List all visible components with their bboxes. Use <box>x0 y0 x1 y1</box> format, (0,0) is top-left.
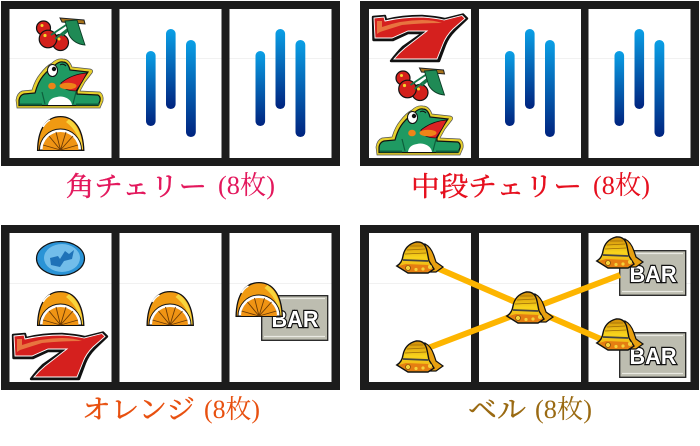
blue bars: right reel <box>256 29 305 137</box>
icon: bell <box>507 292 553 323</box>
panel: 中段チェリー <box>360 1 699 202</box>
icon: seven <box>13 332 107 379</box>
count: 8枚: (8枚) <box>218 171 275 200</box>
icon: bell <box>597 319 643 350</box>
winning lines <box>428 268 620 348</box>
icon: cherry <box>396 68 444 100</box>
icon: bell <box>597 237 643 268</box>
reel frame <box>1 225 340 390</box>
icon: orange <box>147 292 193 325</box>
icon: orange <box>236 283 282 316</box>
heading: ベル: ベル <box>468 395 526 425</box>
heading: 角チェリー: 角チェリー <box>66 172 207 202</box>
panel: 角チェリー <box>1 1 340 202</box>
reel frame <box>360 1 699 166</box>
heading: 中段チェリー: 中段チェリー <box>411 172 582 202</box>
icon: frog <box>16 59 103 108</box>
icon: orange <box>38 292 84 325</box>
count: 8枚: (8枚) <box>204 395 260 424</box>
reel frame <box>360 225 699 390</box>
panel: オレンジ <box>1 225 340 425</box>
icon: bell <box>397 341 443 372</box>
icon: bell <box>397 242 443 273</box>
icon: BAR <box>620 333 686 377</box>
icon: frog <box>376 106 463 155</box>
count: 8枚: (8枚) <box>593 171 650 200</box>
icon: cherry <box>36 18 85 50</box>
blue bars: middle reel <box>146 29 196 137</box>
panel: ベル <box>360 225 699 425</box>
icon: BAR <box>620 251 686 295</box>
icon: seven <box>373 14 467 61</box>
count: 8枚: (8枚) <box>535 395 592 424</box>
reel frame <box>1 1 340 166</box>
blue bars: middle reel <box>505 29 555 137</box>
blue bars: right reel <box>614 29 664 137</box>
heading: オレンジ: オレンジ <box>82 395 195 425</box>
icon: BAR <box>262 296 328 340</box>
icon: orange <box>38 117 84 150</box>
icon: blue moon <box>36 242 84 276</box>
